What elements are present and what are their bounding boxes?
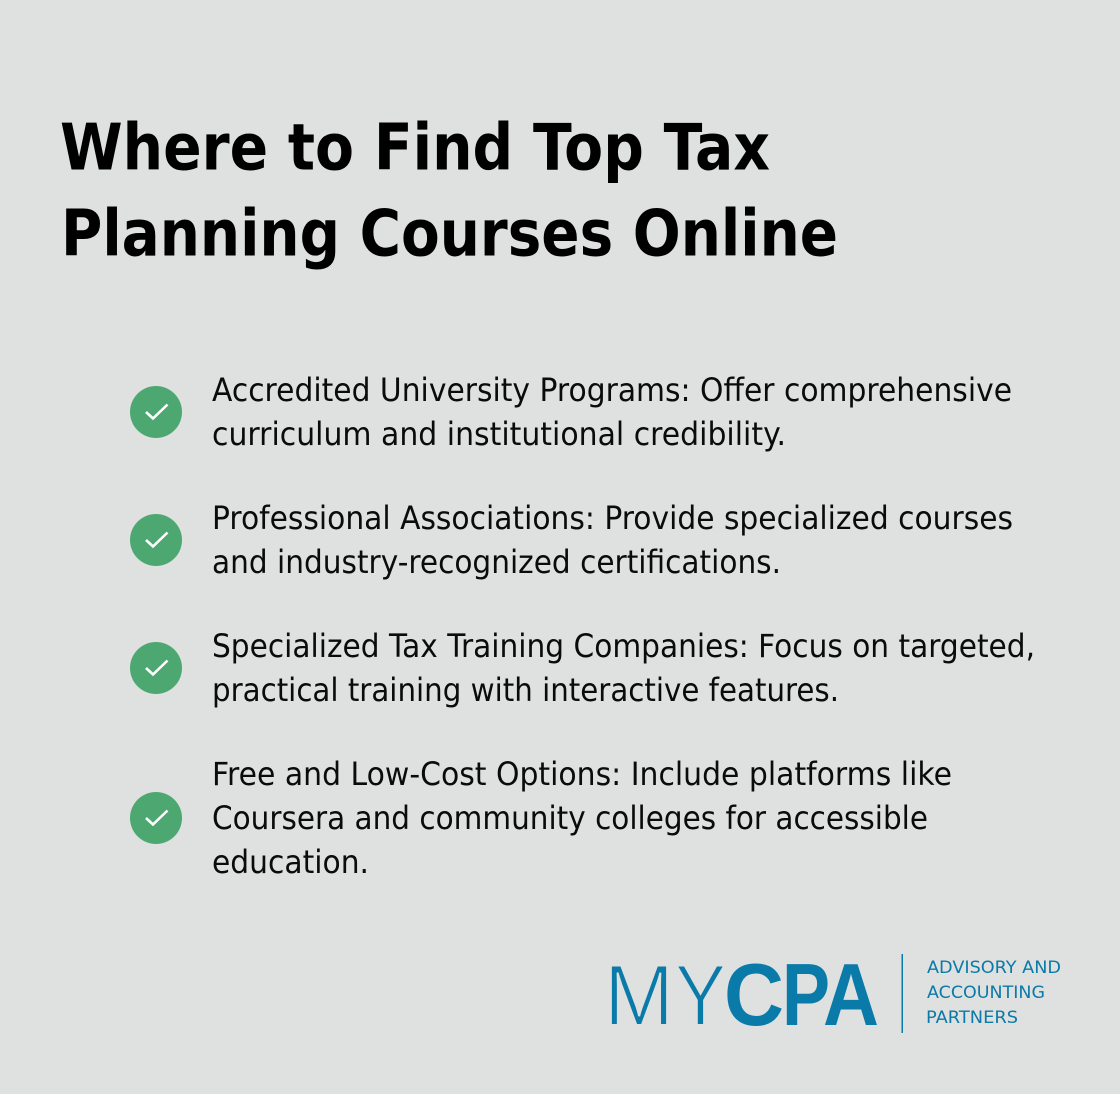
checklist bbox=[130, 371, 1035, 881]
icon: green check bbox=[130, 792, 182, 844]
logo wordmark: M bbox=[604, 948, 674, 1044]
list item: university programs bbox=[130, 371, 1012, 453]
item text bbox=[212, 371, 1012, 453]
item text bbox=[212, 627, 1035, 709]
logo: MYCPA bbox=[604, 945, 1061, 1044]
item text: practical training with interactive features. bbox=[212, 671, 839, 709]
item text: and industry-recognized certifications. bbox=[212, 543, 781, 581]
logo tagline: ACCOUNTING bbox=[927, 983, 1045, 1002]
icon: green check bbox=[130, 642, 182, 694]
logo tagline: PARTNERS bbox=[926, 1008, 1018, 1027]
logo wordmark: Y bbox=[675, 948, 726, 1044]
logo tagline: ADVISORY AND bbox=[927, 958, 1061, 977]
icon: green check bbox=[130, 386, 182, 438]
item text: Accredited University Programs: Offer comprehensive bbox=[212, 371, 1012, 409]
list item: free and low-cost options bbox=[130, 755, 952, 881]
logo tagline bbox=[926, 958, 1061, 1027]
title bbox=[60, 112, 838, 272]
title: Planning Courses Online bbox=[61, 198, 838, 272]
item text: Specialized Tax Training Companies: Focus on targeted, bbox=[212, 627, 1035, 665]
item text bbox=[212, 499, 1013, 581]
item text: Coursera and community colleges for accessible bbox=[212, 799, 928, 837]
logo wordmark bbox=[604, 945, 879, 1044]
list item: professional associations bbox=[130, 499, 1013, 581]
icon: green check bbox=[130, 514, 182, 566]
item text: education. bbox=[212, 843, 369, 881]
item text: curriculum and institutional credibility. bbox=[212, 415, 786, 453]
title: Where to Find Top Tax bbox=[60, 112, 770, 186]
logo wordmark: A bbox=[823, 945, 879, 1044]
logo wordmark: P bbox=[782, 945, 830, 1044]
list item: training companies bbox=[130, 627, 1035, 709]
item text bbox=[212, 755, 952, 881]
logo wordmark: C bbox=[724, 945, 784, 1044]
item text: Free and Low-Cost Options: Include platforms like bbox=[212, 755, 952, 793]
item text: Professional Associations: Provide specialized courses bbox=[212, 499, 1013, 537]
